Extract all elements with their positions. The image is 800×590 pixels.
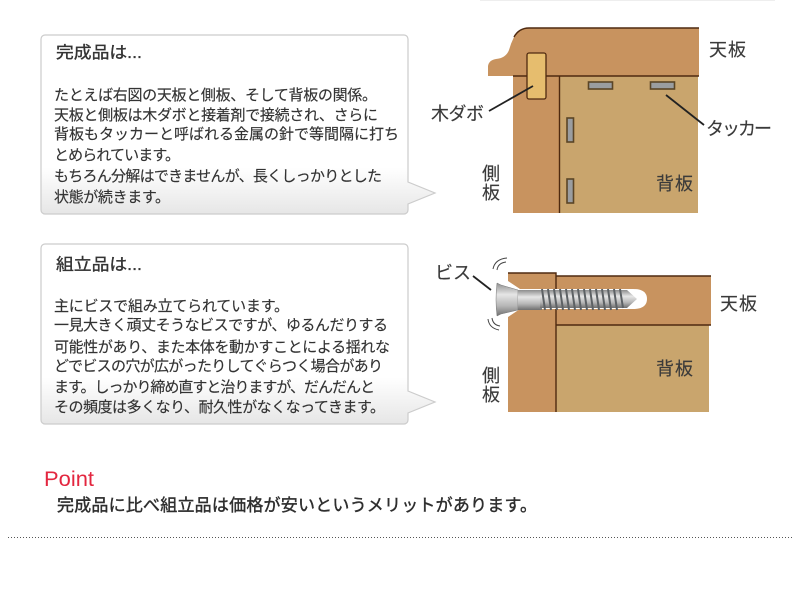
screw hole xyxy=(508,281,647,317)
text: assembled product description xyxy=(54,298,390,416)
top panel xyxy=(488,28,699,76)
icon: wooden dowel xyxy=(527,53,546,99)
back panel xyxy=(556,325,709,412)
text: point summary: 完成品に比べ組立品は価格が安いというメリットがあります。 xyxy=(57,496,537,515)
label: dowel: 木ダボ xyxy=(431,104,484,124)
text: finished product description: もちろん分解はできませんが、長くしっかりとした xyxy=(54,168,382,185)
arrow: tacker leader xyxy=(666,95,704,125)
side panel xyxy=(508,273,556,412)
label: screw: ビス xyxy=(435,263,471,283)
icon: screw xyxy=(496,283,637,316)
text: finished product description: とめられています。 xyxy=(54,147,180,164)
arrow: screw leader xyxy=(473,276,491,290)
top panel xyxy=(556,276,711,325)
text: finished product description: 状態が続きます。 xyxy=(54,189,170,206)
diagram: finished product joint xyxy=(431,28,772,213)
label: side panel: 板 xyxy=(482,183,500,203)
text: assembled product description: 一見大きく頑丈そうなビスですが、ゆるんだりする xyxy=(54,317,388,334)
label: back panel: 背板 xyxy=(656,174,693,194)
text: assembled product description: どでビスの穴が広がったりしてぐらつく場合があり xyxy=(54,358,383,375)
text: assembled product description: 主にビスで組み立てられています。 xyxy=(54,298,289,315)
heading: point: Point xyxy=(44,468,94,491)
arrow: dowel leader xyxy=(489,86,533,111)
label: side panel: 側 xyxy=(482,164,500,184)
heading: finished product: 完成品は... xyxy=(56,43,142,62)
icon: vibration marks xyxy=(488,258,507,330)
panel: finished product callout xyxy=(41,35,435,214)
text: finished product description: たとえば右図の天板と側板、そして背板の関係。 xyxy=(54,87,377,104)
text: finished product description: 背板もタッカーと呼ばれる金属の針で等間隔に打ち xyxy=(54,125,399,143)
heading: assembled product: 組立品は... xyxy=(56,255,142,274)
text: assembled product description: ます。しっかり締め直すと治りますが、だんだんと xyxy=(54,379,375,396)
label: side panel: 板 xyxy=(482,385,500,405)
label: side panel xyxy=(482,164,500,203)
diagram: assembled product joint xyxy=(435,258,757,412)
icon: staples xyxy=(567,82,674,203)
label: top panel: 天板 xyxy=(720,294,757,314)
text: assembled product description: その頻度は多くなり、耐久性がなくなってきます。 xyxy=(54,398,385,416)
label: side panel xyxy=(482,366,500,405)
label: tacker: タッカー xyxy=(706,119,772,139)
text: finished product description xyxy=(54,87,399,206)
label: back panel: 背板 xyxy=(656,359,693,379)
label: top panel: 天板 xyxy=(709,40,746,60)
panel: assembled product callout xyxy=(41,244,435,424)
side panel xyxy=(513,76,560,213)
label: side panel: 側 xyxy=(482,366,500,386)
back panel xyxy=(559,76,698,213)
text: finished product description: 天板と側板は木ダボと接着剤で接続され、さらに xyxy=(54,107,378,124)
text: assembled product description: 可能性があり、また本体を動かすことによる揺れな xyxy=(54,339,390,356)
